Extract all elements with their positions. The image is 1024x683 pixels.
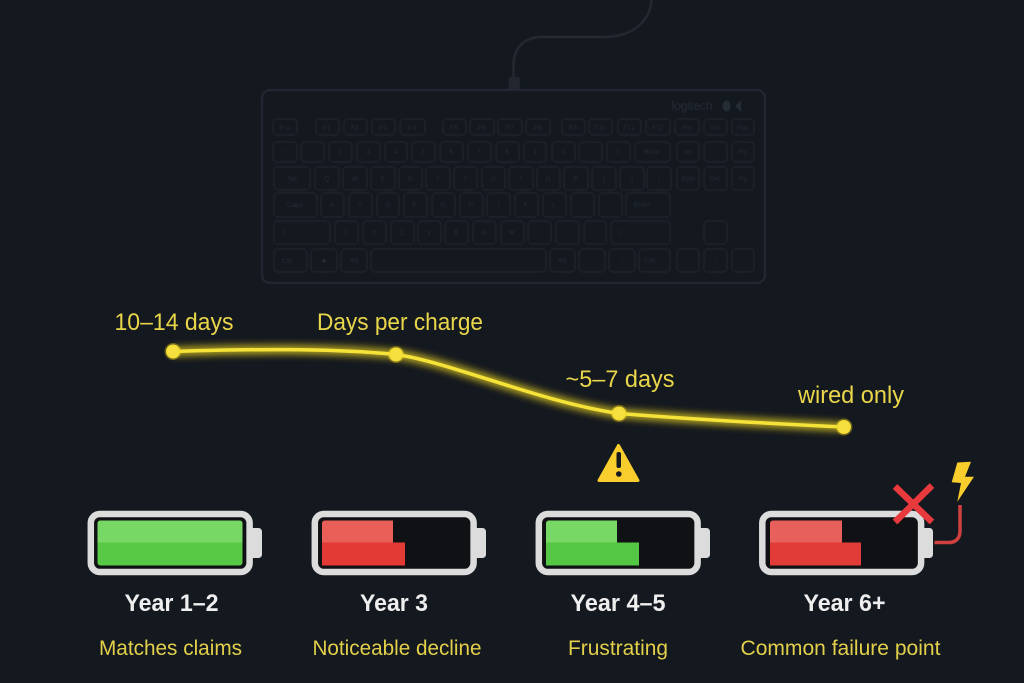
key rows: Alt <box>558 258 566 265</box>
description: Common failure point <box>740 636 941 660</box>
label: 10–14 days: 10–14 days <box>114 309 234 336</box>
icon: red x <box>895 486 932 522</box>
key rows: F8 <box>534 125 542 132</box>
description: Matches claims <box>99 636 242 660</box>
charging cable <box>934 505 960 542</box>
data points <box>166 344 851 434</box>
key rows: / <box>594 230 596 237</box>
key rows: Ins <box>683 149 693 156</box>
key rows: Caps <box>287 202 304 209</box>
key rows: D <box>385 202 391 209</box>
key rows: ↑ <box>713 230 717 237</box>
key rows: N <box>481 230 487 237</box>
key rows: Tab <box>286 176 298 183</box>
key rows: 1 <box>310 149 314 156</box>
key rows: F6 <box>478 125 486 132</box>
year label: Year 3 <box>360 590 428 617</box>
key rows: □ <box>620 258 625 265</box>
key rows: ← <box>684 258 692 265</box>
key rows: \ <box>658 176 660 183</box>
line <box>173 350 844 427</box>
year label: Year 4–5 <box>570 590 666 617</box>
key rows: [ <box>603 176 605 183</box>
description: Noticeable decline <box>312 636 482 660</box>
panel: year 6+ <box>740 462 974 660</box>
key rows: F5 <box>450 125 458 132</box>
key rows: S <box>358 202 363 209</box>
key rows: □ <box>590 258 595 265</box>
key rows: ' <box>609 202 611 209</box>
key rows: ⇧ <box>618 229 624 237</box>
icon: warning triangle <box>599 446 638 480</box>
description: Frustrating <box>568 636 668 660</box>
key rows: = <box>616 149 620 156</box>
key rows: H <box>468 202 474 209</box>
key rows: Bksp <box>644 149 660 156</box>
key rows: F4 <box>408 125 416 132</box>
key rows: F1 <box>323 125 331 132</box>
key rows: 0 <box>561 149 565 156</box>
key rows: 3 <box>366 149 370 156</box>
key rows: Esc <box>279 125 291 132</box>
key rows: ~ <box>283 149 287 156</box>
key rows: → <box>740 258 746 265</box>
key rows: 9 <box>533 149 537 156</box>
key rows: ↓ <box>713 258 717 265</box>
key rows: M <box>509 230 515 237</box>
key rows: A <box>330 202 335 209</box>
key rows: U <box>490 176 496 183</box>
panel: year 3 <box>312 514 486 660</box>
key rows: F12 <box>652 125 664 132</box>
key rows: 6 <box>449 149 453 156</box>
line glow <box>173 350 844 427</box>
key rows: F11 <box>623 125 635 132</box>
key rows: ; <box>581 202 583 209</box>
key rows: I <box>520 176 522 183</box>
key rows: L <box>552 202 556 209</box>
key rows: J <box>496 202 500 209</box>
key rows: W <box>352 176 359 183</box>
key rows: Del <box>710 176 721 183</box>
key rows: Prt <box>683 125 692 132</box>
year label: Year 1–2 <box>124 590 218 617</box>
key rows: C <box>399 230 405 237</box>
keyboard illustration <box>262 0 765 283</box>
key rows: X <box>372 230 377 237</box>
icon: lightning bolt <box>952 462 974 502</box>
key rows: F3 <box>379 125 387 132</box>
key rows: Pau <box>737 125 749 132</box>
key rows: Pg <box>739 149 747 156</box>
key rows: 4 <box>394 149 398 156</box>
key rows: , <box>538 230 540 237</box>
key rows <box>273 119 754 272</box>
battery <box>539 514 710 572</box>
decline line chart <box>114 309 905 434</box>
key rows: Pg <box>739 176 747 183</box>
key rows: / <box>714 149 716 156</box>
key rows: F9 <box>569 125 577 132</box>
battery <box>315 514 486 572</box>
key rows: R <box>407 176 413 183</box>
key rows: 5 <box>421 149 425 156</box>
key rows: Y <box>463 176 468 183</box>
battery <box>762 514 933 572</box>
label: days per charge: Days per charge <box>317 309 483 336</box>
key rows: End <box>682 176 694 183</box>
key rows: ■ <box>322 258 326 265</box>
key rows: ⇧ <box>281 229 287 237</box>
status icons <box>722 100 741 112</box>
key rows: Scr <box>710 125 721 132</box>
year label: Year 6+ <box>804 590 886 617</box>
key rows: Ctrl <box>645 258 656 265</box>
battery <box>91 514 262 572</box>
label: 5–7 days: ~5–7 days <box>566 366 674 393</box>
key rows: G <box>440 202 446 209</box>
key rows: F7 <box>506 125 514 132</box>
key rows: Ctrl <box>282 258 293 265</box>
key rows: Z <box>344 230 349 237</box>
key rows: F2 <box>351 125 359 132</box>
label: wired only: wired only <box>797 382 905 409</box>
key rows: F10 <box>594 125 606 132</box>
key rows: V <box>427 230 432 237</box>
panel: year 4–5 <box>539 514 710 660</box>
key rows: 7 <box>477 149 481 156</box>
key rows: B <box>454 230 459 237</box>
key rows: F <box>413 202 417 209</box>
keyboard cable <box>514 0 652 78</box>
key rows: P <box>574 176 579 183</box>
key rows: T <box>436 176 441 183</box>
panel: year 1–2 <box>91 514 262 660</box>
key rows: ] <box>631 176 633 183</box>
key rows: E <box>381 176 386 183</box>
logitech logo: logitech <box>672 98 712 113</box>
key rows: - <box>589 149 592 156</box>
key rows: 8 <box>505 149 509 156</box>
key rows: O <box>545 176 551 183</box>
keyboard body <box>262 90 765 283</box>
key rows: . <box>566 230 568 237</box>
key rows: Enter <box>634 202 651 209</box>
key rows: Alt <box>350 258 358 265</box>
cable connector <box>508 77 520 90</box>
key rows: 2 <box>338 149 342 156</box>
key rows: Q <box>324 176 330 183</box>
key rows: K <box>524 202 529 209</box>
